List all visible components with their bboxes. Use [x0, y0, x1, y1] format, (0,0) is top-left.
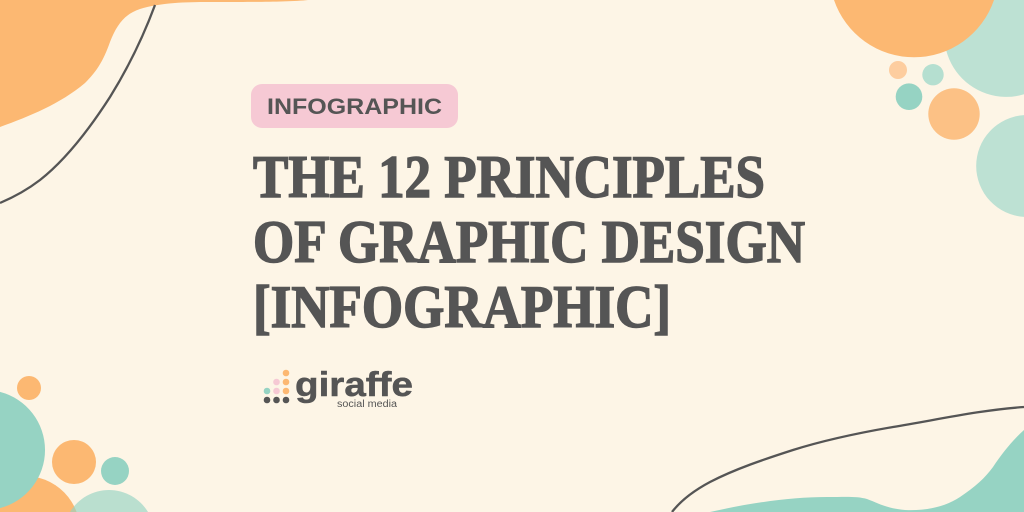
tag: infographic	[251, 84, 458, 128]
bottom-left large teal circle	[0, 392, 45, 508]
logo wordmark: giraffe	[295, 366, 413, 404]
bottom-right teal blob	[710, 430, 1024, 512]
top-left curved line	[0, 5, 155, 203]
title: OF GRAPHIC DESIGN	[253, 209, 805, 275]
bottom-right curved line	[672, 407, 1024, 512]
logo dots	[264, 370, 289, 403]
top-right teal circle	[944, 0, 1024, 97]
small peach circle	[889, 61, 907, 79]
small orange circle top	[17, 376, 41, 400]
top-left orange blob	[0, 0, 308, 127]
tag: infographic: INFOGRAPHIC	[267, 94, 442, 119]
medium orange circle	[928, 88, 980, 140]
medium orange circle bottom-left	[52, 440, 96, 484]
right pale teal circle	[976, 115, 1024, 217]
logo tagline: social media	[337, 399, 397, 410]
title: THE 12 PRINCIPLES	[253, 144, 765, 210]
small teal circle	[896, 83, 922, 110]
title	[253, 144, 805, 340]
title: [INFOGRAPHIC]	[253, 274, 671, 340]
logo: giraffe social media	[264, 366, 413, 410]
small teal circle bottom-left	[101, 457, 129, 485]
bottom-left orange circle	[0, 476, 77, 512]
small pale teal circle	[922, 64, 944, 85]
top-right orange circle	[834, 0, 994, 57]
bottom-left pale teal circle	[70, 490, 148, 512]
